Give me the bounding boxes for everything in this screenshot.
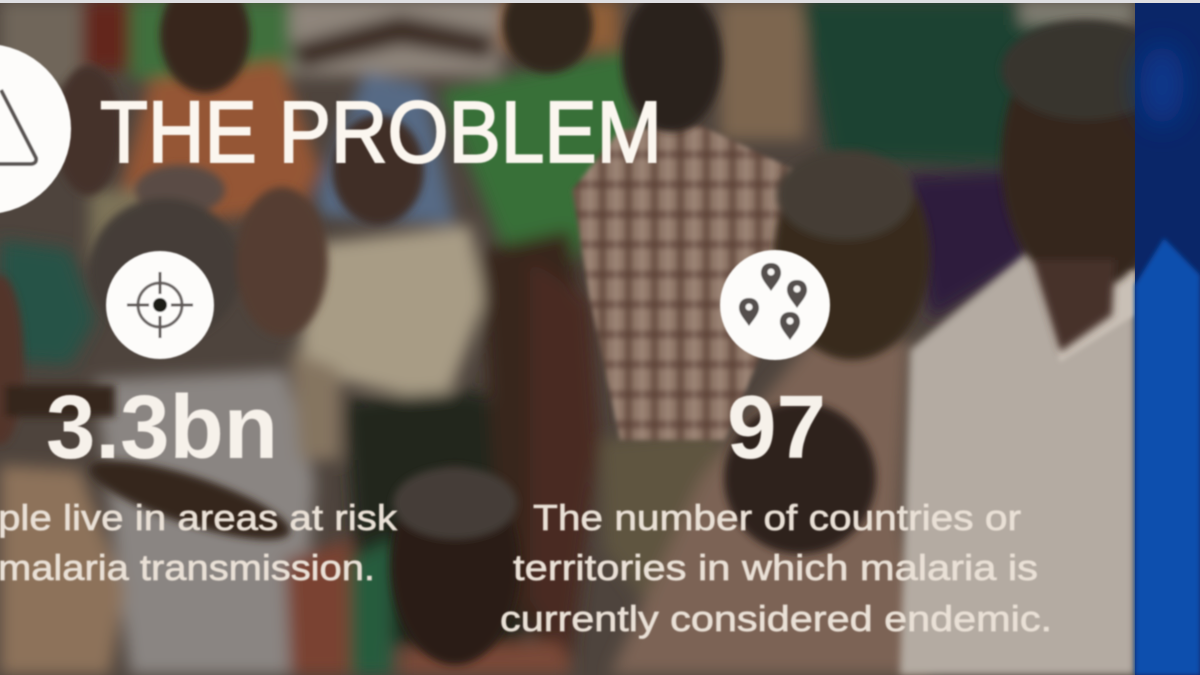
description: people at risk (0, 497, 398, 588)
description: endemic countries: currently considered endemic. (500, 598, 1052, 639)
number: 97: 97 (727, 378, 826, 478)
stat: people at risk (0, 251, 398, 588)
description: people at risk: ple live in areas at risk (0, 497, 398, 538)
icon: target crosshair (106, 251, 214, 359)
number: 3.3bn: 3.3bn (46, 378, 278, 478)
plaid shirt (572, 125, 795, 440)
icon: warning triangle in white circle (0, 44, 71, 214)
stat: endemic countries (500, 250, 1052, 639)
top white edge (0, 0, 1200, 3)
blue side panel (1135, 3, 1200, 675)
description: endemic countries (500, 497, 1052, 639)
description: people at risk: malaria transmission. (0, 547, 375, 588)
icon: map pins (720, 250, 830, 360)
description: endemic countries: territories in which malaria is (513, 547, 1038, 588)
description: endemic countries: The number of countries or (533, 497, 1021, 538)
heading: THE PROBLEM (100, 84, 662, 181)
white shirt of boy at right (900, 250, 1135, 675)
